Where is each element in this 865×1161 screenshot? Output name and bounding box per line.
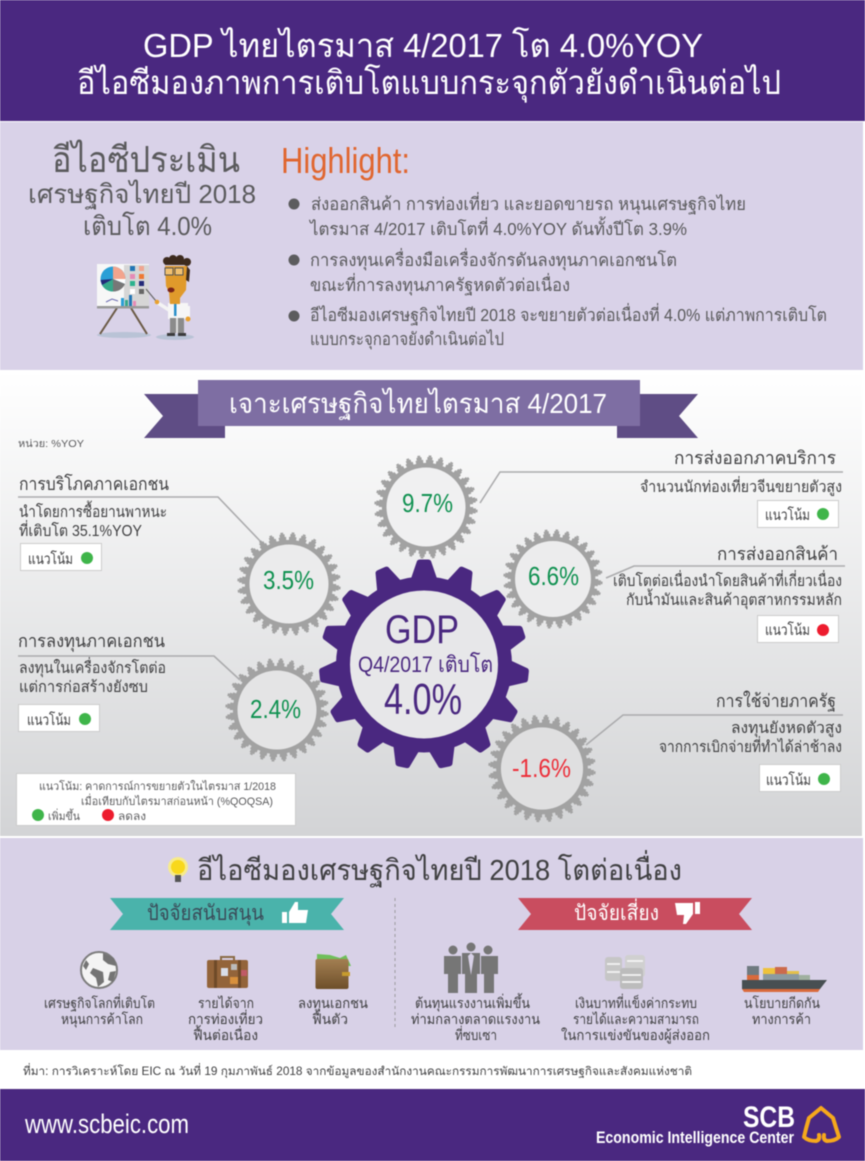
highlight bullets: แบบกระจุกอาจยังดำเนินต่อไป [310,329,504,350]
gear: private consumption 3.5% [238,533,340,635]
text block: private investment: แต่การก่อสร้างยังซบ [19,679,148,696]
factor: private investment recovery: ฟื้นตัว [312,1009,348,1027]
panel: EIC outlook 2018 [0,838,863,1050]
text block: service exports: การส่งออกภาคบริการ [674,448,836,468]
factor: labour costs: ที่ซบเซา [455,1026,497,1043]
legend: ลดลง [118,811,146,823]
gear: goods exports 6.6%: 6.6% [528,561,579,591]
icon: coins [605,955,645,989]
factor: labour costs: ต้นทุนแรงงานเพิ่มขึ้น [415,993,530,1012]
gear: service exports 9.7% [375,456,477,558]
chart: central GDP gear: Q4/2017 เติบโต [358,652,493,677]
chart: central GDP gear: 4.0% [384,675,462,724]
text block: private consumption: นำโดยการซื้อยานพาหนะ [19,500,167,521]
title [77,27,781,103]
text block: goods exports: การส่งออกสินค้า [717,544,838,564]
title: อีไอซีมองภาพการเติบโตแบบกระจุกตัวยังดำเนินต่อไป [77,64,781,103]
ribbon: risk factors: ปัจจัยเสี่ยง [574,898,659,925]
text block: government spending [659,690,842,792]
icon: suitcase [207,957,248,988]
factor: trade protectionism: นโยบายกีดกัน [744,995,820,1011]
icon: business people [444,942,498,993]
factor: strong baht [561,955,710,1044]
text block: private consumption: การบริโภคภาคเอกชน [19,473,169,494]
text block: private consumption [19,473,169,570]
source note: ที่มา: การวิเคราะห์โดย EIC ณ วันที่ 19 กุมภาพันธ์ 2018 จากข้อมูลของสำนักงานคณะกรรมการพัฒนาการเศรษฐกิจและสังคมแห่งชาติ [23,1063,692,1078]
factor: global economy: หนุนการค้าโลก [61,1011,143,1028]
heading: outlook: อีไอซีมองเศรษฐกิจไทยปี 2018 โตต่อเนื่อง [197,850,682,888]
ribbon heading: เจาะเศรษฐกิจไทยไตรมาส 4/2017 [229,388,607,420]
title: GDP ไทยไตรมาส 4/2017 โต 4.0%YOY [143,27,703,64]
factor: tourism income: รายได้จาก [198,995,254,1011]
text block: service exports: จำนวนนักท่องเที่ยวจีนขยายตัวสูง [640,476,842,497]
text block: goods exports: กับน้ำมันและสินค้าอุตสาหกรรมหลัก [626,588,842,610]
text block: goods exports: แนวโน้ม [765,621,810,639]
factor: strong baht: เงินบาทที่แข็งค่ากระทบ [575,994,697,1011]
chart: central GDP gear [318,560,530,770]
heading: EIC forecast: อีไอซีประเมิน [52,139,240,180]
text block: government spending: การใช้จ่ายภาครัฐ [716,690,836,712]
legend [16,774,296,826]
gear: private consumption 3.5%: 3.5% [263,565,314,595]
factor: global economy [44,952,155,1028]
icon: presenter with chart [97,255,194,340]
highlight bullets: อีไอซีมองเศรษฐกิจไทยปี 2018 จะขยายตัวต่อเนื่องที่ 4.0% แต่ภาพการเติบโต [310,303,827,326]
heading: Highlight: Highlight: [281,140,410,181]
factor: labour costs [411,942,540,1043]
factor: strong baht: ในการแข่งขันของผู้ส่งออก [561,1027,710,1044]
legend: เพิ่มขึ้น [48,808,80,823]
website: www.scbeic.com [24,1109,189,1139]
gear: goods exports 6.6% [504,530,602,628]
icon: SCB logo [804,1108,839,1141]
icon: light bulb [168,857,188,882]
highlight bullets: การลงทุนเครื่องมือเครื่องจักรดันลงทุนภาคเอกชนโต [310,248,677,271]
text block: service exports [640,448,842,528]
ribbon: supporting factors [110,898,344,930]
heading: EIC forecast: เติบโต 4.0% [83,211,212,241]
ribbon heading [144,380,698,438]
factor: tourism income [188,957,263,1043]
gear: service exports 9.7%: 9.7% [402,488,453,518]
heading: EIC forecast [28,139,256,241]
highlight bullets: ขณะที่การลงทุนภาครัฐหดตัวต่อเนื่อง [310,273,570,296]
unit note: หน่วย: %YOY [18,439,84,450]
highlight bullets: ไตรมาส 4/2017 เติบโตที่ 4.0%YOY ดันทั้งปีโต 3.9% [308,216,687,239]
SCB wordmark: SCB [743,1101,795,1134]
gear: government spending -1.6% [489,716,595,821]
footer [0,1089,865,1161]
panel: Thai economy Q4/2017 breakdown [0,372,862,836]
factor: tourism income: การท่องเที่ยว [188,1010,263,1027]
icon: thumb up [282,902,308,923]
icon: globe [81,952,117,988]
legend: เมื่อเทียบกับไตรมาสก่อนหน้า (%QOQSA) [81,793,273,808]
SCB wordmark [596,1101,795,1147]
gear: private investment 2.4% [226,659,328,761]
factor: tourism income: ฟื้นต่อเนื่อง [193,1025,258,1043]
factor: strong baht: รายได้และความสามารถ [573,1011,699,1027]
panel: EIC assessment and highlight [0,122,863,370]
factor: trade protectionism: ทางการค้า [752,1011,811,1027]
leader lines [18,472,845,745]
text block: goods exports [613,544,842,642]
text block: private consumption: แนวโน้ม [28,550,73,568]
text block: private investment: ลงทุนในเครื่องจักรโตต่อ [19,657,166,678]
ribbon: risk factors [518,898,752,930]
factor: private investment recovery: ลงทุนเอกชน [298,995,368,1012]
text block: private investment [18,631,166,732]
factor: labour costs: ท่ามกลางตลาดแรงงาน [411,1011,540,1027]
text block: government spending: แนวโน้ม [766,771,811,789]
text block: government spending: ลงทุนยังหดตัวสูง [731,720,842,738]
highlight bullets: ส่งออกสินค้า การท่องเที่ยว และยอดขายรถ หนุนเศรษฐกิจไทย [311,192,746,215]
header band [0,0,865,121]
gear: government spending -1.6%: -1.6% [512,753,571,783]
factor: trade protectionism [742,966,827,1027]
heading: EIC forecast: เศรษฐกิจไทยปี 2018 [28,179,256,210]
highlight bullets [288,192,827,350]
text block: private investment: แนวโน้ม [27,711,71,729]
text block: private investment: การลงทุนภาคเอกชน [18,631,165,652]
icon: container ship [742,966,827,992]
text block: private consumption: ที่เติบโต 35.1%YOY [19,520,142,540]
legend: แนวโน้ม: คาดการณ์การขยายตัวในไตรมาส 1/2018 [39,779,276,793]
text block: service exports: แนวโน้ม [765,506,810,524]
factor: private investment recovery [298,954,368,1027]
factor: global economy: เศรษฐกิจโลกที่เติบโต [44,994,155,1012]
text block: government spending: จากการเบิกจ่ายที่ทำได้ล่าช้าลง [659,736,842,756]
text block: goods exports: เติบโตต่อเนื่องนำโดยสินค้าที่เกี่ยวเนื่อง [613,570,842,590]
icon: wallet [316,954,351,989]
icon: thumb down [675,902,700,924]
chart: central GDP gear: GDP [385,608,459,652]
gear: private investment 2.4%: 2.4% [250,694,301,724]
SCB wordmark: Economic Intelligence Center [596,1128,794,1147]
ribbon: supporting factors: ปัจจัยสนับสนุน [147,902,264,926]
